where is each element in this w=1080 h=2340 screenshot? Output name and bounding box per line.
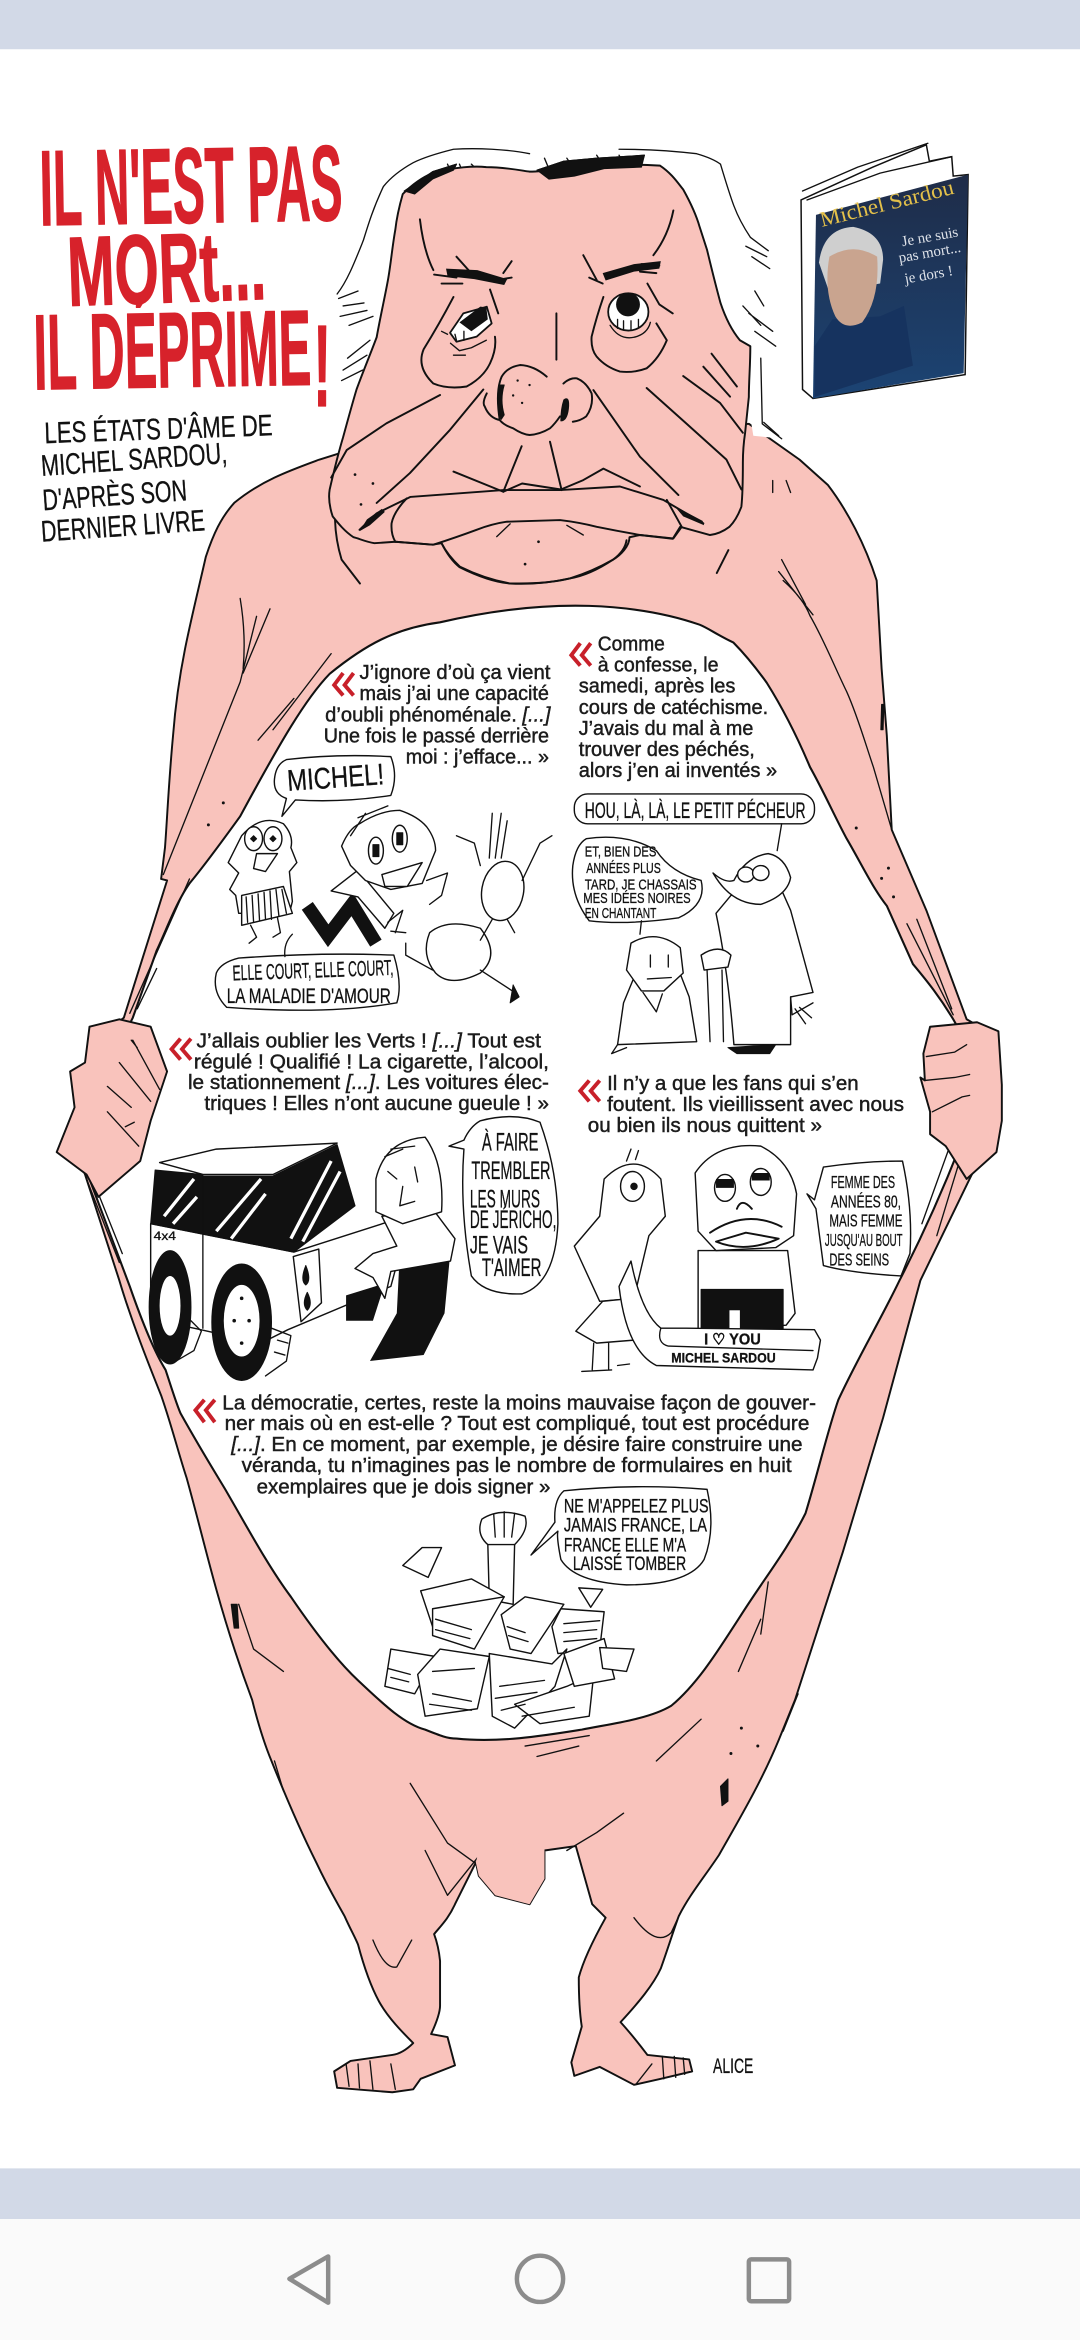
cover title: Michel Sardou [817, 175, 956, 232]
quote 4: ou bien ils nous quittent » [588, 1115, 822, 1137]
speech bubble: Jericho: DE JÉRICHO, [470, 1205, 556, 1234]
quote 2: à confesse, le [598, 655, 719, 677]
speech bubble: Michel: MICHEL! [286, 758, 385, 798]
title: IL DÉPRIME [33, 288, 312, 413]
quote text: Il n’y a que les fans qui s’en [607, 1073, 859, 1095]
sausage banner: MICHEL SARDOU [671, 1351, 776, 1367]
quote 1: Une fois le passé derrière [324, 726, 549, 748]
woman running right [406, 813, 552, 1003]
speech bubble: Jericho: JE VAIS [470, 1232, 528, 1260]
speech bubble: France [531, 1487, 711, 1585]
car label: 4x4 [154, 1229, 176, 1243]
hair strokes [337, 149, 782, 439]
speech bubble: femme des annees 80 [807, 1161, 911, 1276]
title: MORt... [66, 210, 268, 327]
guillemet [334, 673, 354, 695]
subtitle: DERNIER LIVRE [40, 504, 206, 549]
speech bubble: Jericho: LES MURS [470, 1185, 540, 1213]
cartoon 4: fan and banner [574, 1146, 911, 1371]
body silhouette [75, 424, 985, 2092]
speech bubble: la maladie d'amour: LA MALADIE D'AMOUR [227, 983, 391, 1008]
quote 5: véranda, tu n’imagines pas le nombre de formulaires en huit [242, 1455, 792, 1477]
man torso [355, 1209, 455, 1298]
hairline scribble [404, 155, 644, 194]
speech bubble: femme des annees 80: DES SEINS [829, 1250, 889, 1270]
speech bubble: femme des annees 80: FEMME DES [831, 1172, 895, 1192]
man torso [331, 870, 394, 928]
subtitle: D'APRÈS SON [41, 474, 188, 517]
quote 1: d’oubli phénoménale. [...] [325, 705, 551, 727]
quote 2: trouver des péchés, [579, 739, 755, 761]
mouth [360, 487, 703, 530]
car body [151, 1215, 410, 1343]
speech bubble: idees noires: ET, BIEN DES [585, 844, 656, 861]
hair [337, 149, 782, 439]
toes [346, 2056, 685, 2089]
quote 5 [195, 1392, 816, 1498]
quote 3: régulé ! Qualifié ! La cigarette, l’alcool, [194, 1052, 549, 1074]
subtitle: MICHEL SARDOU, [40, 437, 228, 483]
skin folds and marks [87, 560, 964, 1967]
cartoon 1: Michel running [215, 756, 552, 1010]
speech bubble: la maladie d'amour [215, 934, 399, 1010]
speech bubble: femme des annees 80: JUSQU'AU BOUT [825, 1230, 903, 1250]
running man [307, 806, 448, 943]
icon: recent square [749, 2259, 789, 2301]
belly opening [90, 606, 985, 1740]
hairline redraw [404, 155, 644, 194]
quote 3 [172, 1030, 549, 1115]
speech bubble: idees noires [572, 837, 702, 934]
car roof [160, 1143, 337, 1174]
eyebrows [434, 257, 659, 284]
guillemet [571, 643, 591, 666]
speech bubble: femme des annees 80: ANNÉES 80, [831, 1191, 901, 1211]
man trousers [346, 1251, 450, 1361]
chin [442, 540, 627, 584]
inner lip [497, 524, 583, 537]
man with shirt [695, 1146, 797, 1331]
speech bubble: idees noires: EN CHANTANT [585, 905, 656, 922]
quote 2: samedi, après les [579, 675, 735, 697]
speech bubble: Jericho [449, 1117, 558, 1294]
nose bridge [555, 313, 557, 360]
speech bubble: Jericho: À FAIRE [482, 1128, 539, 1157]
quote text: J’ignore d’où ça vient [360, 662, 551, 684]
speech bubble: Jericho: TREMBLER [471, 1157, 550, 1185]
speech bubble: France: FRANCE ELLE M'A [564, 1535, 686, 1557]
woman with skirt [228, 820, 297, 943]
skin dots [207, 801, 895, 1755]
caricature face [329, 155, 791, 584]
flying papers [403, 1548, 442, 1577]
quote 2: cours de catéchisme. [579, 697, 768, 719]
cartoon 2: priest and child [572, 794, 814, 1054]
right hand [920, 1022, 1002, 1179]
man black trousers [307, 904, 376, 943]
woman fan [574, 1149, 665, 1371]
icon: home circle [517, 2256, 563, 2302]
quote 2 [571, 634, 777, 782]
quote text: Comme [598, 634, 665, 656]
icon: back triangle [289, 2256, 328, 2303]
bottom band [0, 2168, 1080, 2219]
nose [484, 365, 592, 435]
title: ! [313, 301, 331, 431]
cover subtitle [897, 224, 962, 288]
man head [376, 1137, 442, 1224]
speech bubble: France: LAISSÉ TOMBER [573, 1552, 686, 1575]
guillemet [580, 1080, 600, 1101]
head shape [329, 165, 750, 584]
cover subtitle: je dors ! [902, 263, 954, 288]
quote 4 [580, 1073, 904, 1137]
quote 3: le stationnement [...]. Les voitures élec- [188, 1072, 549, 1094]
speech bubble: Jericho: T'AIMER [482, 1254, 541, 1282]
quote 1 [324, 662, 551, 768]
quote 3: triques ! Elles n’ont aucune gueule ! » [204, 1093, 549, 1115]
hair left [337, 149, 453, 391]
groin flap [476, 1839, 544, 1904]
quote 2: J’avais du mal à me [579, 718, 753, 740]
speech bubble: idees noires: MES IDÉES NOIRES [583, 890, 691, 907]
speech bubble: femme des annees 80: MAIS FEMME [829, 1211, 903, 1231]
signature: ALICE [713, 2055, 753, 2078]
speech bubble: le petit pecheur: HOU, LÀ, LÀ, LE PETIT PÉCHEUR [585, 798, 806, 823]
cartoon 3: man and 4x4 [149, 1117, 558, 1380]
speech bubble: Michel [274, 756, 395, 816]
cheek lines [331, 354, 743, 503]
sausage banner: I ♡ YOU [704, 1332, 761, 1349]
raised arm and fist [480, 1512, 526, 1604]
quote 2: alors j’en ai inventés » [579, 760, 777, 782]
speech bubble: France: JAMAIS FRANCE, LA [564, 1515, 707, 1537]
speech bubble: France: NE M'APPELEZ PLUS [564, 1496, 709, 1518]
book pages [801, 145, 968, 398]
cover background [813, 175, 968, 398]
speech bubble: idees noires: TARD, JE CHASSAIS [585, 876, 697, 893]
priest [713, 854, 813, 1054]
left eye [442, 307, 492, 355]
sausage banner [619, 1261, 820, 1370]
right eye [608, 292, 650, 338]
eye bags [421, 284, 673, 388]
jowls and neck [335, 520, 728, 584]
forehead lines [420, 210, 673, 280]
cartoon 5: raised fist on paper stacks [385, 1487, 711, 1728]
rear wheel [149, 1251, 201, 1364]
quote 5: [...]. En ce moment, par exemple, je désire faire construire une [230, 1434, 803, 1456]
upper lip [453, 469, 640, 492]
subtitle: LES ÉTATS D'ÂME DE [44, 409, 273, 450]
left hand [57, 1019, 167, 1197]
speech bubble: idees noires: ANNÉES PLUS [586, 860, 661, 877]
front wheel [212, 1264, 291, 1380]
man head [342, 810, 436, 889]
quote 5: exemplaires que je dois signer » [257, 1476, 550, 1498]
quote 1: moi : j’efface... » [406, 746, 549, 768]
character body [75, 424, 985, 2092]
quote text: J’allais oublier les Verts ! [...] Tout est [196, 1030, 542, 1052]
author photo [814, 227, 913, 397]
hair right [619, 149, 782, 439]
top band [0, 0, 1080, 49]
cover subtitle: pas mort... [897, 240, 962, 267]
child [612, 937, 731, 1054]
cover subtitle: Je ne suis [900, 224, 960, 250]
text: IL N'EST PAS [39, 123, 343, 248]
quote 4: foutent. Ils vieillissent avec nous [607, 1094, 904, 1116]
guillemet [195, 1400, 215, 1422]
guillemet [172, 1039, 191, 1060]
speech bubble: la maladie d'amour: ELLE COURT, ELLE COURT, [232, 955, 394, 985]
car door [293, 1249, 321, 1322]
subtitle [40, 409, 273, 549]
speech bubble: le petit pecheur [574, 794, 814, 851]
car windows [151, 1145, 355, 1252]
skin pores [354, 379, 540, 565]
book cover [801, 143, 968, 398]
quote 5: ner mais où en est-elle ? Tout est compliqué, tout est procédure [225, 1413, 809, 1435]
quote 1: mais j’ai une capacité [360, 683, 549, 705]
title [33, 123, 343, 431]
lower lip [391, 498, 682, 545]
navigation bar [0, 2219, 1080, 2340]
paper stacks [385, 1579, 634, 1728]
quote text: La démocratie, certes, reste la moins mauvaise façon de gouver- [222, 1392, 816, 1414]
